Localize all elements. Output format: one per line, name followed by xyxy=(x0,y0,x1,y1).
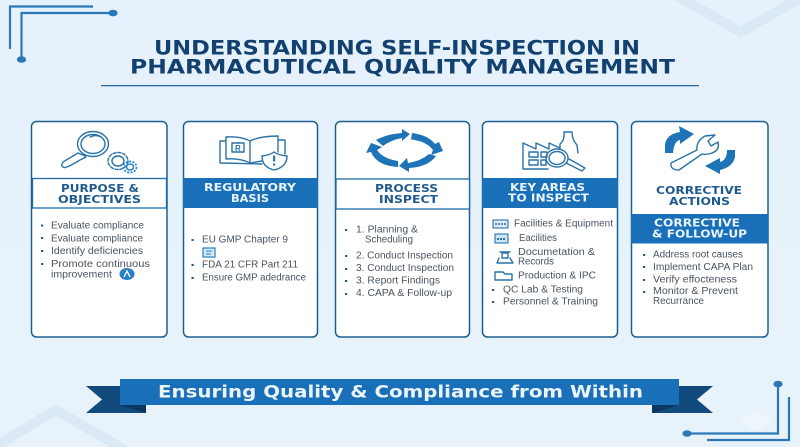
bullet list xyxy=(41,220,150,280)
corner accent: top left xyxy=(10,6,116,62)
panel heading: INSPECT xyxy=(379,193,439,206)
title: PHARMACUTICAL QUALITY MANAGEMENT xyxy=(130,56,676,78)
bullet list: Verify effocteness xyxy=(653,274,737,286)
icon: wrench with arrows xyxy=(665,126,735,174)
panel heading: BASIS xyxy=(231,192,269,205)
panel subheading xyxy=(656,184,742,208)
bullet list: Evaluate compliance xyxy=(51,220,144,232)
panel subheading: ACTIONS xyxy=(669,195,730,208)
panel: process xyxy=(336,122,470,337)
bullet list: Identify deficiencies xyxy=(51,246,143,257)
panel: corrective actions xyxy=(631,122,768,337)
panel heading: KEY AREAS xyxy=(510,181,585,194)
icon: book with shield: R xyxy=(235,144,241,153)
panel heading xyxy=(183,178,318,208)
icon list: Records xyxy=(518,256,554,268)
icon list: Personnel & Training xyxy=(503,296,598,308)
bullet list: EU GMP Chapter 9 xyxy=(202,234,288,246)
panel heading: OBJECTIVES xyxy=(58,193,141,206)
bullet list xyxy=(345,224,454,299)
bullet list xyxy=(643,250,753,307)
bullet list: Evaluate compliance xyxy=(51,234,143,244)
bullet list: 4. CAPA & Follow-up xyxy=(356,288,452,299)
banner ribbon: Ensuring Quality & Compliance from Within xyxy=(158,382,643,402)
icon list: QC Lab & Testing xyxy=(503,284,583,296)
panel subheading: CORRECTIVE xyxy=(656,184,742,197)
banner ribbon xyxy=(86,379,713,413)
bullet list: Recurrance xyxy=(653,296,704,307)
panel heading: & FOLLOW-UP xyxy=(652,228,747,240)
bullet list xyxy=(192,234,306,284)
panel: purpose and objectives xyxy=(32,122,167,337)
panel heading: PURPOSE & xyxy=(61,182,139,195)
bullet list: improvement xyxy=(51,270,112,280)
icon list: Facilities & Equipment xyxy=(514,218,613,230)
icon list xyxy=(492,218,613,308)
panel heading xyxy=(32,178,166,208)
panel heading xyxy=(336,179,470,209)
corner accent: bottom right xyxy=(684,382,789,440)
bullet list: 3. Conduct Inspection xyxy=(356,263,454,274)
bullet list: Scheduling xyxy=(365,234,413,246)
panel heading xyxy=(482,178,618,208)
icon list: Documetation & xyxy=(518,247,595,258)
panel: key areas xyxy=(482,122,618,337)
panel: regulatory basis xyxy=(183,122,318,337)
panel heading: PROCESS xyxy=(375,182,438,195)
bullet list: Monitor & Prevent xyxy=(653,286,738,297)
bullet list: 3. Report Findings xyxy=(356,276,440,286)
panel heading: TO INSPECT xyxy=(508,192,590,204)
icon: magnifier with gears xyxy=(62,132,136,172)
bullet list: Address root causes xyxy=(653,250,743,260)
title xyxy=(130,36,676,78)
icon: factory with magnifier xyxy=(523,132,585,171)
bullet list: Promote continuous xyxy=(51,259,150,270)
panel heading xyxy=(631,214,768,244)
bullet list: 1. Planning & xyxy=(356,224,418,236)
bullet list: Implement CAPA Plan xyxy=(653,262,753,273)
icon: small badge xyxy=(120,268,134,280)
icon: document xyxy=(203,248,215,257)
panel heading: CORRECTIVE xyxy=(654,216,740,230)
bullet list: 2. Conduct Inspection xyxy=(356,250,453,262)
icon list: Eacilities xyxy=(519,233,557,244)
title: UNDERSTANDING SELF-INSPECTION IN xyxy=(154,36,640,60)
icon: cycle arrows xyxy=(366,129,443,172)
icon: book with shield xyxy=(220,136,287,170)
panel heading: REGULATORY xyxy=(204,181,297,194)
icon list: Production & IPC xyxy=(518,270,596,282)
bullet list: FDA 21 CFR Part 211 xyxy=(202,260,298,270)
bullet list: Ensure GMP adedrance xyxy=(202,272,306,284)
